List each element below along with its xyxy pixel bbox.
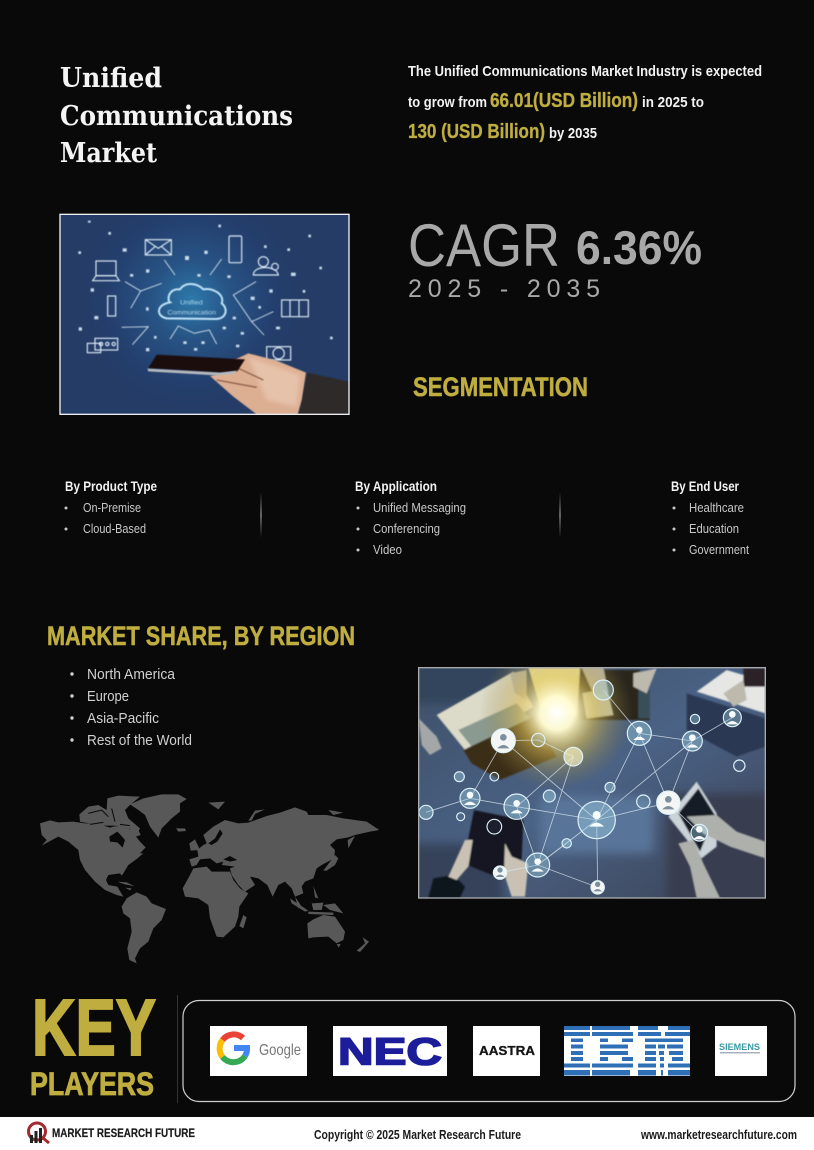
- icon: cloud label: [167, 300, 216, 316]
- region list: North America: [87, 666, 176, 683]
- CAGR figure: [408, 212, 702, 303]
- map cutouts: black sea and baltic: [208, 829, 237, 862]
- chart: network links: [426, 690, 732, 887]
- market forecast summary text: [408, 63, 762, 143]
- chart: network nodes: [419, 680, 745, 894]
- segment column: by application: Conferencing: [373, 522, 440, 536]
- key players panel: [183, 1000, 795, 1102]
- CAGR figure: CAGR: [408, 212, 560, 279]
- photo: central yellow light: [484, 668, 628, 784]
- chart: darker person icons on white nodes: [496, 734, 674, 891]
- segment column: by end user: By End User: [671, 478, 739, 494]
- map: europe, asia, africa, oceania: [183, 802, 379, 952]
- segment column: by application: [355, 478, 466, 557]
- segment column: by end user: Healthcare: [689, 501, 744, 515]
- map: americas: [40, 794, 187, 963]
- key players heading: [30, 983, 156, 1102]
- segment column: by product type: Cloud-Based: [83, 522, 146, 536]
- region list: [70, 666, 192, 749]
- segment column: by application: Unified Messaging: [373, 501, 466, 515]
- heading: market share by region: MARKET SHARE, BY REGION: [47, 621, 355, 651]
- icon: cloud label: Communication: [167, 310, 216, 316]
- heading: segmentation: SEGMENTATION: [413, 372, 588, 402]
- logo: IBM: [564, 1026, 690, 1076]
- logo: Siemens: [715, 1026, 767, 1076]
- market forecast summary text: by 2035: [549, 125, 597, 142]
- CAGR figure: 2025 - 2035: [408, 275, 604, 303]
- logo: Siemens: SIEMENS: [719, 1042, 760, 1053]
- segment column: by end user: Education: [689, 522, 739, 536]
- divider: [260, 492, 262, 538]
- image: unified communication cloud and hand: [60, 214, 349, 414]
- segment column: by product type: [64, 478, 157, 536]
- icon: hand: [210, 353, 306, 414]
- chart: node person icons: [464, 711, 738, 872]
- icon: smartphone: [148, 355, 245, 373]
- icon: network glyphs: [87, 236, 308, 360]
- divider: [560, 492, 561, 538]
- logo: Google: [210, 1026, 307, 1076]
- divider: [177, 995, 178, 1103]
- market forecast summary text: 66.01(USD Billion): [490, 90, 638, 112]
- icon: cloud label: Unified: [180, 300, 203, 306]
- key players heading: KEY: [32, 983, 156, 1072]
- region list: Rest of the World: [87, 732, 192, 749]
- market forecast summary text: The Unified Communications Market Industry is expected: [408, 63, 762, 80]
- logo: NEC: NEC: [338, 1032, 442, 1074]
- key players heading: PLAYERS: [30, 1066, 154, 1102]
- segment column: by end user: Government: [689, 543, 749, 557]
- CAGR figure: 6.36%: [576, 221, 702, 274]
- region list: Asia-Pacific: [87, 710, 159, 727]
- icon: scattered data dots: [78, 221, 333, 351]
- logo: Aastra: [473, 1026, 540, 1076]
- segment column: by application: Video: [373, 543, 402, 557]
- logo: NEC: [333, 1026, 447, 1076]
- segment column: by end user: [671, 478, 749, 557]
- icon: market research future logo: [28, 1123, 49, 1143]
- title: [60, 63, 293, 169]
- footer copyright: Copyright © 2025 Market Research Future: [314, 1127, 521, 1142]
- world map: [40, 794, 379, 963]
- title: Market: [60, 138, 157, 169]
- photo: table shading: [419, 668, 765, 898]
- segment column: by product type: By Product Type: [65, 478, 157, 494]
- title: Communications: [60, 101, 293, 132]
- segment column: by application: By Application: [355, 478, 437, 494]
- logo: Aastra: AASTRA: [479, 1043, 536, 1058]
- region list: Europe: [87, 688, 129, 705]
- photo: objects and hands: [419, 668, 765, 898]
- market forecast summary text: to grow from: [408, 94, 487, 111]
- market forecast summary text: in 2025 to: [642, 94, 704, 111]
- footer brand: MARKET RESEARCH FUTURE: [52, 1128, 195, 1140]
- logo: Google: Google: [259, 1042, 301, 1059]
- title: Unified: [60, 63, 162, 94]
- footer bar: [0, 1117, 814, 1150]
- market forecast summary text: 130 (USD Billion): [408, 121, 545, 143]
- map cutout: hudson bay and arctic channels: [109, 832, 125, 848]
- image: team with network overlay: [418, 667, 766, 899]
- icon: sleeve: [298, 373, 349, 414]
- segment column: by product type: On-Premise: [83, 501, 141, 515]
